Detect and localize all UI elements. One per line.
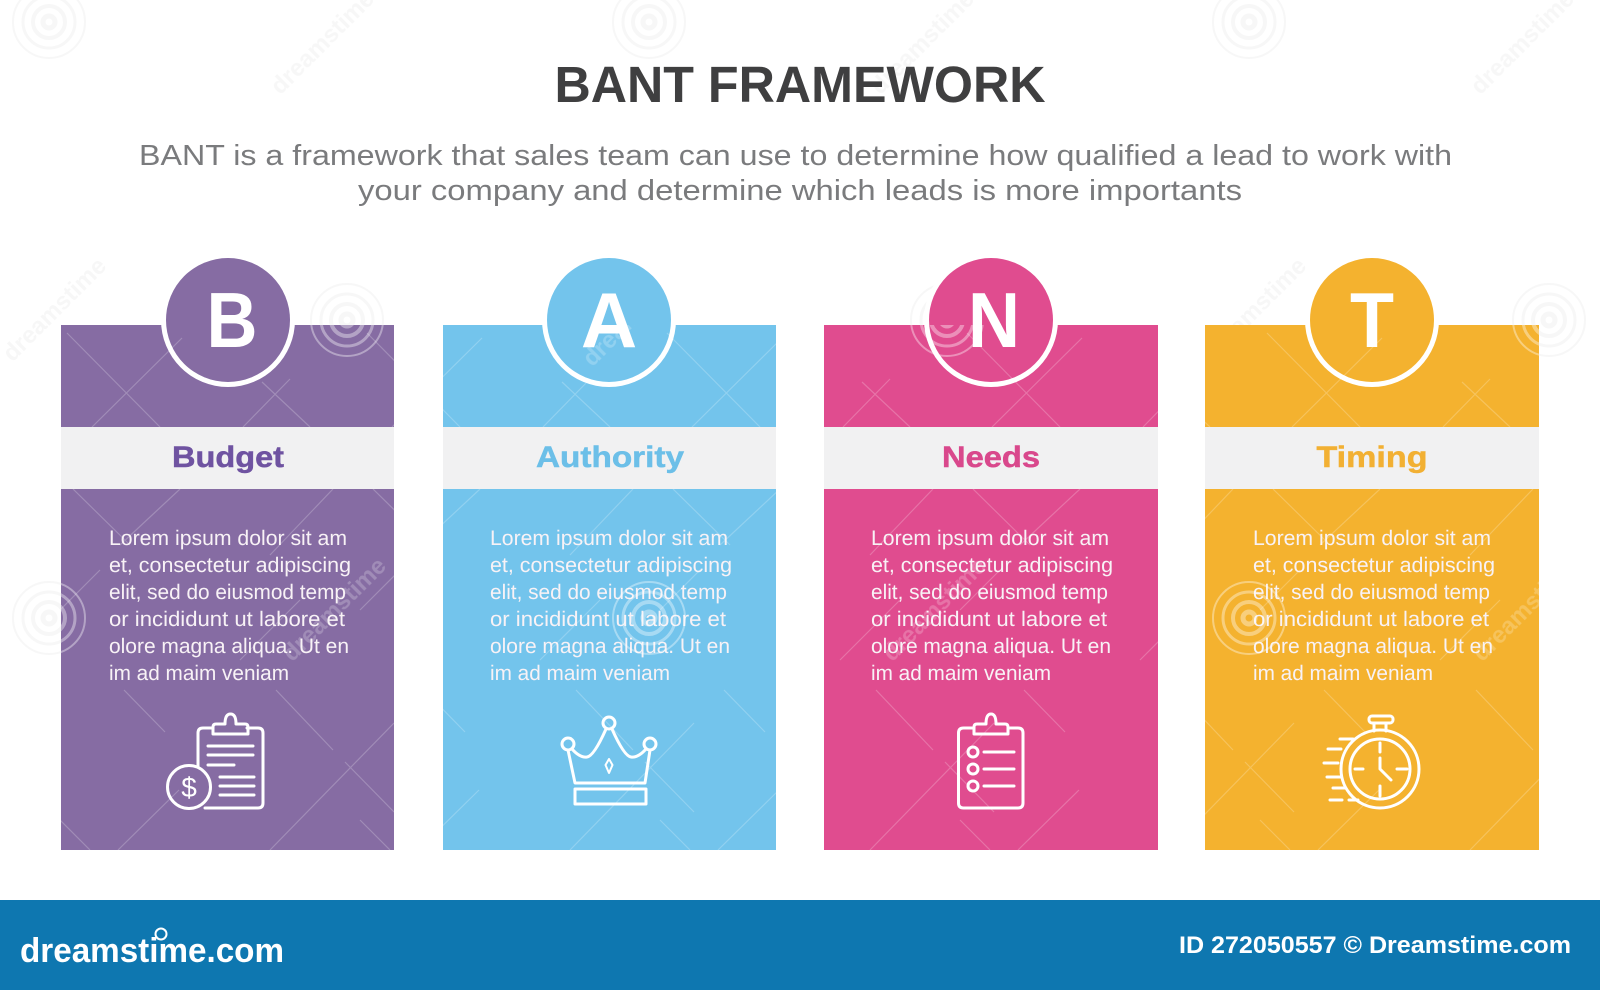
text block: authority: Lorem ipsum dolor sit am: [490, 527, 728, 550]
badge: A: A: [581, 276, 637, 364]
text block: budget: or incididunt ut labore et: [109, 608, 345, 631]
subtitle: your company and determine which leads is more importants: [358, 175, 1242, 207]
icon: clipboard with dollar coin: [168, 714, 263, 808]
text block: timing: et, consectetur adipiscing: [1253, 554, 1495, 577]
text block: authority: or incididunt ut labore et: [490, 608, 726, 631]
text block: authority: im ad maim veniam: [490, 662, 670, 685]
panel: timing: [1205, 253, 1539, 850]
text block: timing: olore magna aliqua. Ut en: [1253, 635, 1493, 658]
text block: timing: [1253, 527, 1495, 685]
watermark over panels: dreamstime: [578, 258, 692, 372]
text block: authority: elit, sed do eiusmod temp: [490, 581, 727, 604]
badge: N: [924, 253, 1058, 387]
text block: authority: et, consectetur adipiscing: [490, 554, 732, 577]
icon: crown: [562, 717, 656, 804]
text block: budget: im ad maim veniam: [109, 662, 289, 685]
text block: timing: elit, sed do eiusmod temp: [1253, 581, 1490, 604]
text block: budget: Lorem ipsum dolor sit am: [109, 527, 347, 550]
watermark over panels: dreamstime: [1468, 553, 1582, 667]
text block: needs: Lorem ipsum dolor sit am: [871, 527, 1109, 550]
subtitle: BANT is a framework that sales team can use to determine how qualified a lead to work with: [139, 140, 1452, 172]
panel: authority: [443, 253, 776, 850]
heading: Needs: Needs: [942, 441, 1040, 474]
badge: A: [542, 253, 676, 387]
text block: timing: Lorem ipsum dolor sit am: [1253, 527, 1491, 550]
subtitle: [139, 140, 1452, 207]
text block: budget: [109, 527, 351, 685]
icon: clipboard with dollar coin: $: [181, 772, 197, 803]
footer bar: [0, 900, 1600, 990]
text block: budget: elit, sed do eiusmod temp: [109, 581, 346, 604]
panel: needs: [824, 253, 1158, 850]
text block: needs: [871, 527, 1113, 685]
heading: Timing: Timing: [1316, 441, 1428, 474]
text block: authority: olore magna aliqua. Ut en: [490, 635, 730, 658]
badge: T: [1305, 253, 1439, 387]
text block: needs: or incididunt ut labore et: [871, 608, 1107, 631]
text block: timing: or incididunt ut labore et: [1253, 608, 1489, 631]
footer id: ID 272050557 © Dreamstime.com: [1179, 932, 1571, 959]
panel: budget: [61, 253, 394, 850]
watermark over panels: dreamstime: [878, 553, 992, 667]
text block: budget: olore magna aliqua. Ut en: [109, 635, 349, 658]
icon: checklist clipboard: [958, 714, 1023, 808]
footer logo: dreamstime.com: [20, 932, 284, 970]
text block: needs: olore magna aliqua. Ut en: [871, 635, 1111, 658]
icon: stopwatch: [1324, 716, 1419, 808]
text block: authority: [490, 527, 732, 685]
watermark over panels: [61, 325, 1539, 850]
title: BANT FRAMEWORK: [554, 56, 1046, 113]
watermark on white background: [0, 0, 1585, 654]
text block: needs: et, consectetur adipiscing: [871, 554, 1113, 577]
heading: Authority: Authority: [536, 441, 684, 474]
heading: Budget: Budget: [172, 441, 284, 474]
text block: needs: elit, sed do eiusmod temp: [871, 581, 1108, 604]
text block: needs: im ad maim veniam: [871, 662, 1051, 685]
badge: B: [161, 253, 295, 387]
text block: budget: et, consectetur adipiscing: [109, 554, 351, 577]
watermark over panels: dreamstime: [278, 553, 392, 667]
badge: B: B: [206, 276, 258, 364]
badge: N: N: [968, 276, 1020, 364]
watermark on white background: dreamstime: [1198, 253, 1312, 367]
watermark on white background: dreamstime: [0, 253, 112, 367]
badge: T: T: [1350, 276, 1394, 364]
text block: timing: im ad maim veniam: [1253, 662, 1433, 685]
